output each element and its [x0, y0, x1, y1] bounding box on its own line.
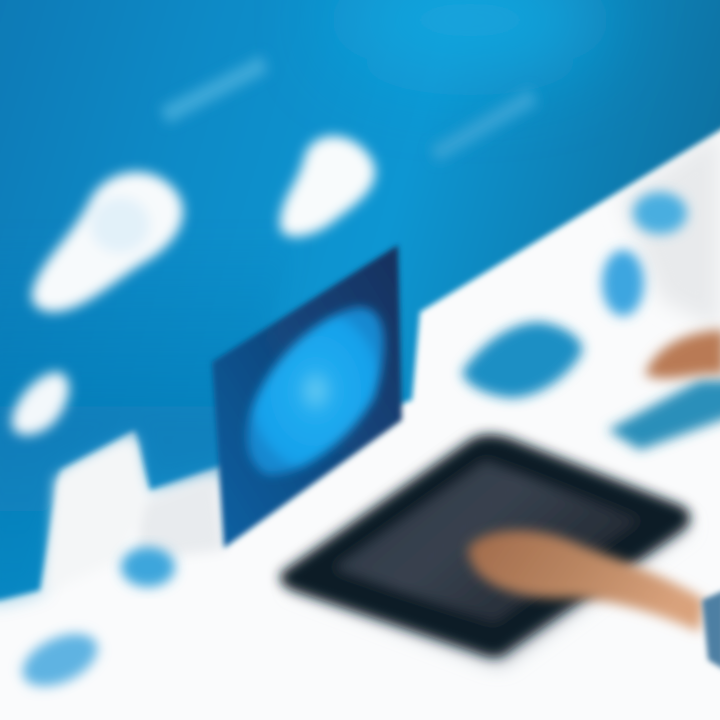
tablet: blue upright	[212, 245, 402, 548]
cloud: small left	[12, 372, 69, 435]
icon: blue oval top right	[633, 192, 687, 234]
cloud: upper middle	[280, 136, 375, 237]
floor: soft grey shade	[135, 475, 225, 560]
icon: blue oval right	[602, 250, 644, 316]
hand: on tablet with arm	[468, 530, 705, 632]
icon: blue oval bottom left	[14, 623, 106, 697]
cloud: large left	[32, 172, 183, 312]
tablet: shadow	[290, 445, 690, 665]
streak: upper middle	[430, 88, 538, 162]
background: light top glow	[340, 0, 600, 70]
tablet: dark on floor	[280, 434, 690, 657]
tablet screen glow	[247, 307, 384, 475]
hand: upper right	[645, 330, 720, 379]
streak: upper left	[160, 55, 268, 124]
icon: blue pill on floor, centre	[462, 322, 582, 398]
card: blue at right edge	[608, 380, 720, 450]
floor: grey shading at right edge	[620, 130, 720, 330]
background: lower wall shading	[0, 332, 249, 614]
sleeve: blue cuff at bottom right	[702, 590, 720, 670]
floor: white block lower-left	[48, 437, 145, 592]
icon: blue dot lower left	[121, 547, 175, 587]
